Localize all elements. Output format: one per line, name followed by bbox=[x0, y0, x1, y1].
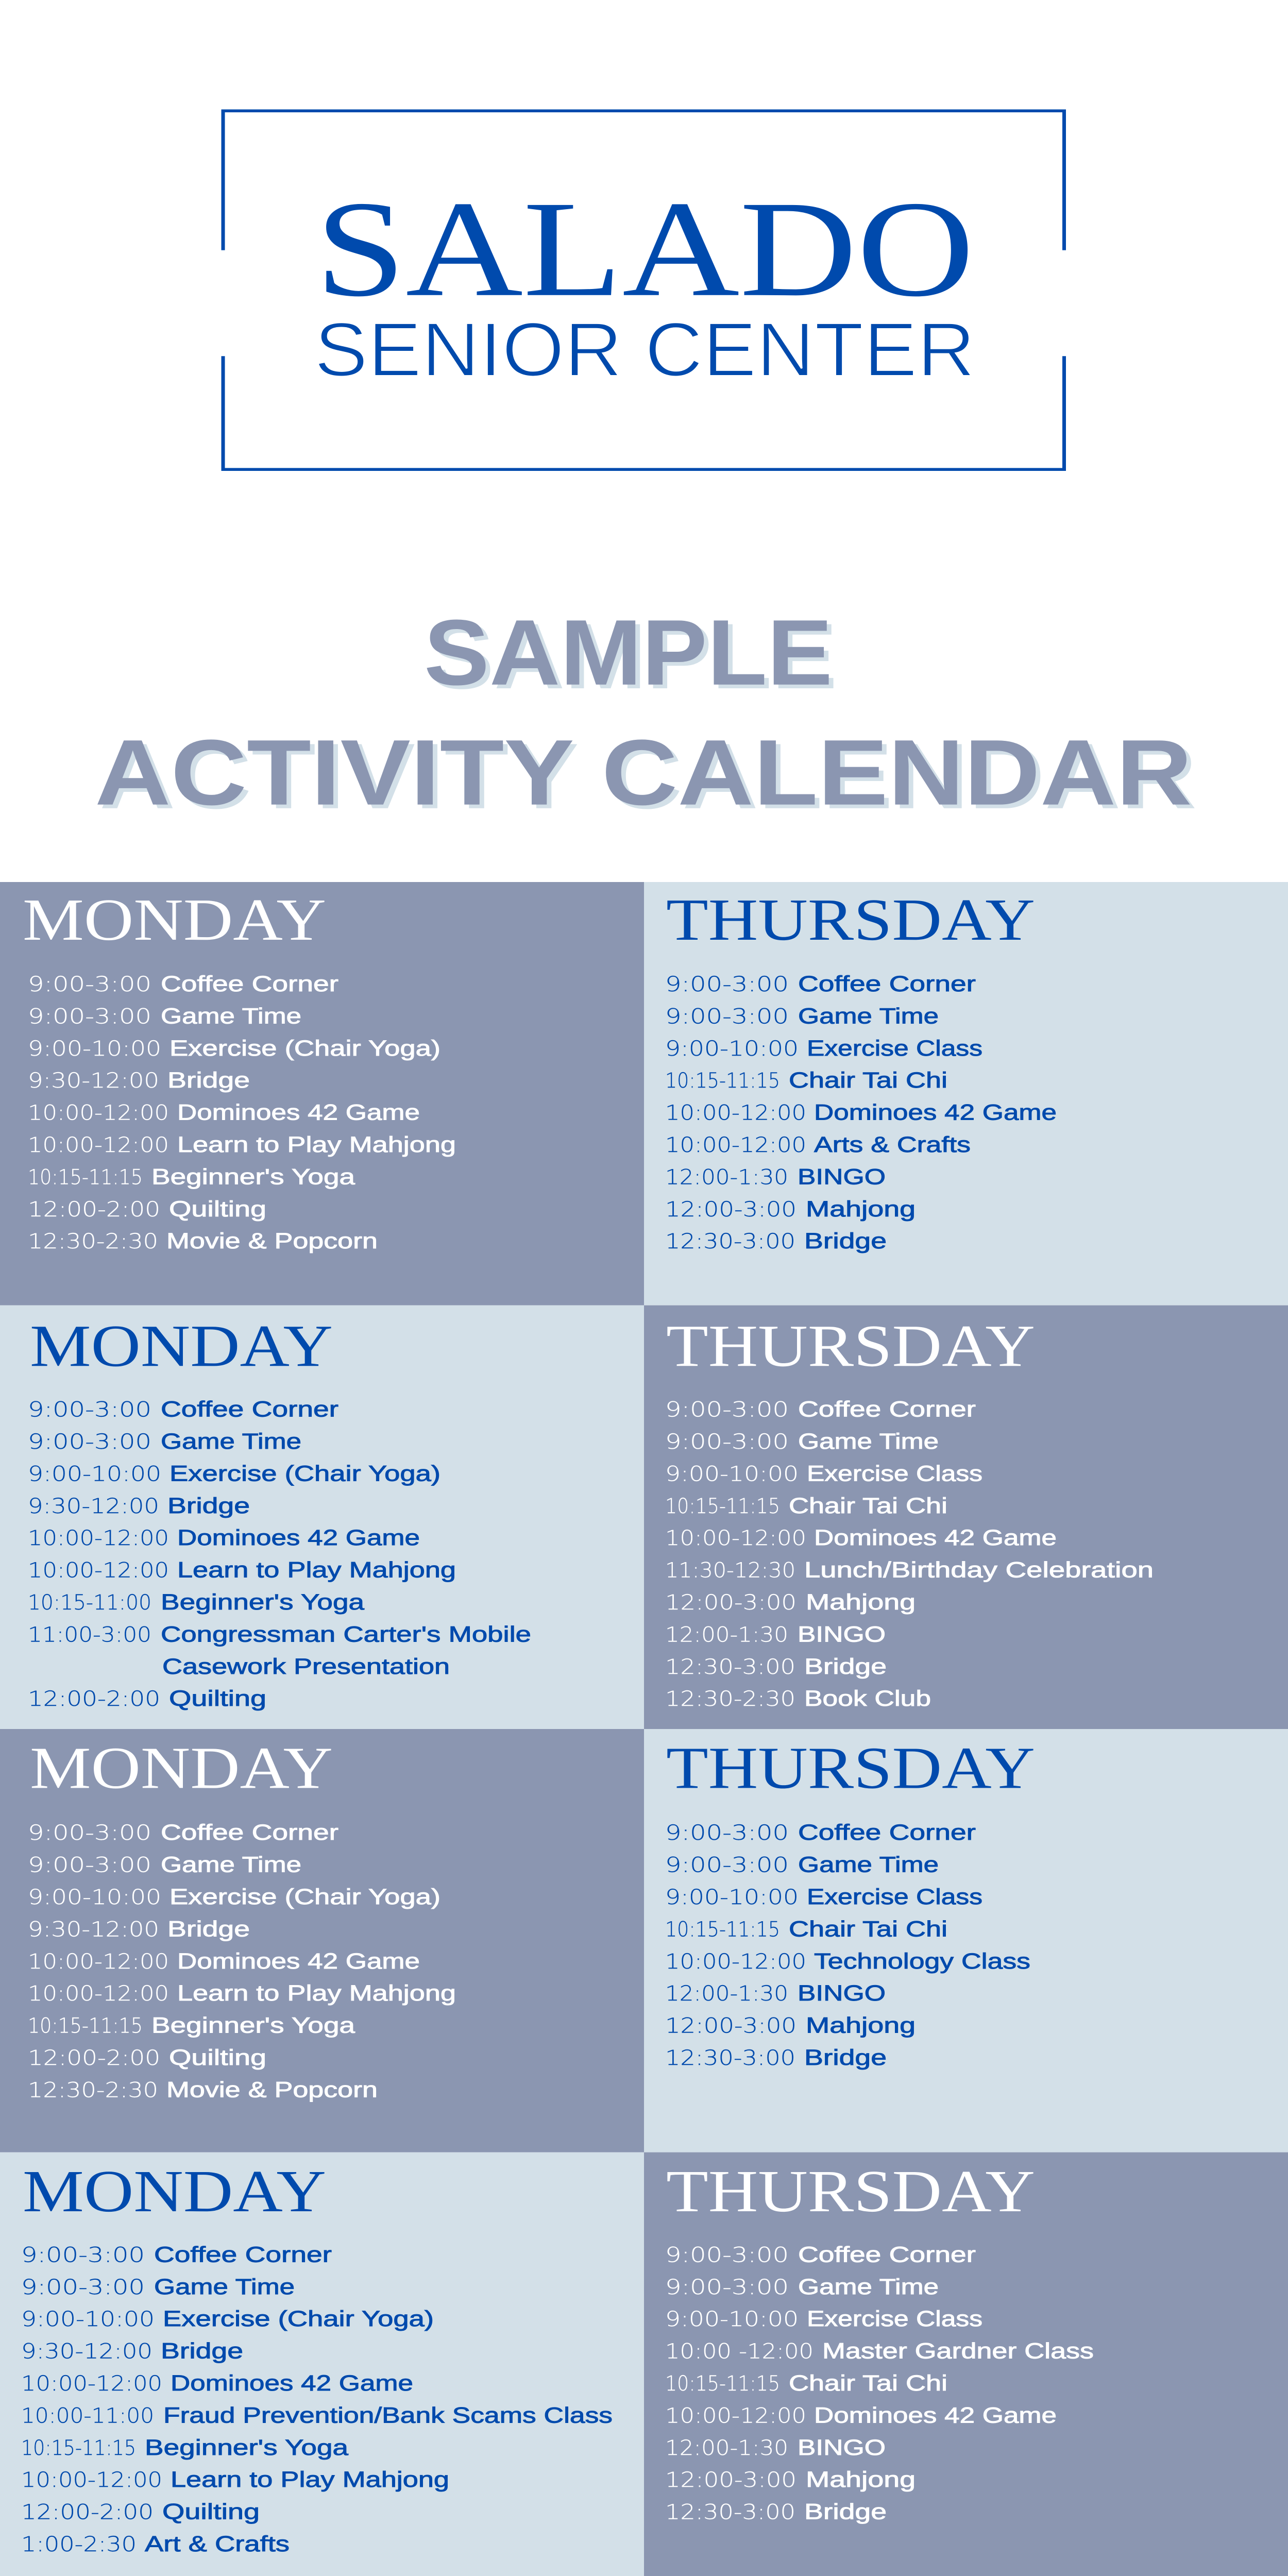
schedule list: Beginner's Yoga bbox=[161, 1590, 364, 1615]
schedule list: 10:15-11:15 bbox=[21, 2436, 136, 2460]
schedule list: Dominoes 42 Game bbox=[177, 1100, 420, 1125]
schedule list: 10:00-12:00 bbox=[28, 1950, 169, 1974]
logo: Salado Senior Center bbox=[223, 111, 1064, 469]
schedule list: 9:00-10:00 bbox=[665, 1885, 799, 1909]
schedule list: 12:00-1:30 bbox=[665, 1165, 788, 1189]
title line 2: Activity Calendar: ACTIVITY CALENDAR bbox=[99, 724, 1197, 828]
heading: Monday: MONDAY bbox=[30, 1735, 333, 1801]
schedule list: 10:00-12:00 bbox=[665, 1950, 806, 1974]
schedule list: 9:00-3:00 bbox=[665, 972, 789, 996]
schedule list: 12:30-3:00 bbox=[665, 1229, 795, 1253]
schedule list bbox=[21, 2243, 613, 2556]
schedule list: 9:00-3:00 bbox=[28, 1853, 151, 1877]
schedule list: Book Club bbox=[804, 1687, 931, 1711]
schedule list: Mahjong bbox=[806, 1590, 916, 1615]
schedule list: 10:15-11:15 bbox=[28, 2013, 143, 2038]
schedule list: 12:30-2:30 bbox=[28, 2078, 158, 2102]
schedule list: 10:00 -12:00 bbox=[665, 2339, 814, 2363]
schedule list bbox=[28, 1397, 531, 1711]
schedule list: 12:00-3:00 bbox=[665, 2468, 796, 2492]
schedule list: 10:00-12:00 bbox=[665, 1100, 806, 1125]
schedule list: Game Time bbox=[161, 1430, 301, 1454]
schedule list: 10:15-11:00 bbox=[28, 1590, 151, 1615]
logo frame bbox=[223, 111, 1064, 469]
schedule list: 12:00-2:00 bbox=[28, 1687, 160, 1711]
schedule list: 12:00-2:00 bbox=[28, 2046, 160, 2070]
schedule list: Quilting bbox=[169, 1197, 266, 1222]
schedule list: Exercise (Chair Yoga) bbox=[163, 2307, 434, 2331]
schedule list: 10:00-12:00 bbox=[28, 1558, 169, 1582]
schedule list: Coffee Corner bbox=[798, 2243, 976, 2267]
schedule list bbox=[665, 1821, 1030, 2070]
schedule list: Technology Class bbox=[814, 1950, 1030, 1974]
panel: week 2 Thursday bbox=[644, 1306, 1288, 1729]
schedule list: Game Time bbox=[798, 2275, 939, 2299]
schedule list: 12:30-3:00 bbox=[665, 1655, 795, 1679]
schedule list: 10:00-12:00 bbox=[21, 2371, 162, 2396]
schedule list: Exercise Class bbox=[807, 1462, 982, 1486]
schedule list: Casework Presentation bbox=[162, 1655, 450, 1679]
schedule list: 9:30-12:00 bbox=[28, 1917, 159, 1941]
logo wordmark: Salado: SALADO bbox=[315, 173, 974, 325]
logo subtitle: Senior Center: SENIOR CENTER bbox=[314, 307, 975, 392]
schedule list: 9:00-3:00 bbox=[21, 2275, 145, 2299]
schedule list: 9:00-10:00 bbox=[28, 1037, 161, 1061]
schedule list: Game Time bbox=[798, 1430, 939, 1454]
schedule list: Coffee Corner bbox=[154, 2243, 332, 2267]
schedule list: Game Time bbox=[798, 1004, 939, 1028]
title line 2: Activity Calendar: ACTIVITY CALENDAR bbox=[95, 721, 1192, 824]
schedule list: 12:00-1:30 bbox=[665, 1981, 788, 2006]
schedule list: 10:00-12:00 bbox=[28, 1526, 169, 1550]
schedule list: 9:00-3:00 bbox=[665, 1004, 789, 1028]
schedule list bbox=[28, 972, 456, 1253]
schedule list: Bridge bbox=[804, 2500, 887, 2524]
schedule list: Exercise Class bbox=[807, 1037, 982, 1061]
schedule list: Bridge bbox=[804, 1655, 887, 1679]
schedule list: 10:00-12:00 bbox=[665, 1133, 806, 1157]
schedule list: 10:15-11:15 bbox=[665, 2371, 780, 2396]
schedule list: Coffee Corner bbox=[161, 1397, 338, 1421]
schedule list: 12:30-3:00 bbox=[665, 2500, 795, 2524]
schedule list: Exercise Class bbox=[807, 1885, 982, 1909]
schedule list: Coffee Corner bbox=[798, 1821, 976, 1845]
schedule list: Bridge bbox=[167, 1917, 250, 1941]
schedule list: 9:00-3:00 bbox=[665, 2243, 789, 2267]
schedule list: Quilting bbox=[162, 2500, 260, 2524]
schedule list: 10:00-12:00 bbox=[665, 2403, 806, 2428]
schedule list: 11:30-12:30 bbox=[665, 1558, 795, 1582]
panel: week 3 Thursday bbox=[644, 1729, 1288, 2153]
schedule list: Chair Tai Chi bbox=[789, 2371, 947, 2396]
schedule list: Exercise Class bbox=[807, 2307, 982, 2331]
schedule list: Dominoes 42 Game bbox=[177, 1950, 420, 1974]
panel: week 1 Monday bbox=[0, 882, 644, 1306]
schedule list: Learn to Play Mahjong bbox=[177, 1558, 456, 1582]
panel: week 4 Thursday bbox=[644, 2153, 1288, 2576]
schedule list: Arts & Crafts bbox=[814, 1133, 971, 1157]
schedule list: Bridge bbox=[161, 2339, 243, 2363]
schedule list: 9:00-10:00 bbox=[21, 2307, 155, 2331]
schedule list: Exercise (Chair Yoga) bbox=[170, 1885, 440, 1909]
schedule list: 9:00-3:00 bbox=[665, 2275, 789, 2299]
schedule list: Learn to Play Mahjong bbox=[171, 2468, 449, 2492]
schedule list: 12:00-1:30 bbox=[665, 1622, 788, 1647]
heading: Thursday: THURSDAY bbox=[666, 2159, 1035, 2225]
schedule list: Coffee Corner bbox=[161, 972, 338, 996]
schedule list: Exercise (Chair Yoga) bbox=[170, 1037, 440, 1061]
schedule list: Chair Tai Chi bbox=[789, 1494, 947, 1518]
schedule list: 10:00-12:00 bbox=[28, 1133, 169, 1157]
schedule list: Game Time bbox=[798, 1853, 939, 1877]
schedule list: 10:15-11:15 bbox=[28, 1165, 143, 1189]
schedule list: Game Time bbox=[161, 1004, 301, 1028]
schedule list: Bridge bbox=[804, 1229, 887, 1253]
schedule list: 10:15-11:15 bbox=[665, 1069, 780, 1093]
schedule list: Exercise (Chair Yoga) bbox=[170, 1462, 440, 1486]
title line 1: Sample: SAMPLE bbox=[424, 601, 833, 705]
schedule list: Quilting bbox=[169, 2046, 266, 2070]
schedule list: 9:00-3:00 bbox=[665, 1430, 789, 1454]
schedule list: Bridge bbox=[167, 1494, 250, 1518]
schedule list bbox=[665, 1397, 1154, 1711]
schedule list: 10:15-11:15 bbox=[665, 1494, 780, 1518]
schedule list: Lunch/Birthday Celebration bbox=[804, 1558, 1154, 1582]
schedule list: 10:15-11:15 bbox=[665, 1917, 780, 1941]
schedule list: 10:00-12:00 bbox=[28, 1100, 169, 1125]
schedule list: Mahjong bbox=[806, 2468, 916, 2492]
schedule list: Beginner's Yoga bbox=[145, 2436, 348, 2460]
schedule list: 9:00-3:00 bbox=[28, 1004, 151, 1028]
heading: Monday: MONDAY bbox=[23, 2159, 326, 2225]
schedule list: 9:00-3:00 bbox=[28, 1821, 151, 1845]
schedule list: Movie & Popcorn bbox=[166, 2078, 378, 2102]
schedule list: 12:30-2:30 bbox=[28, 1229, 158, 1253]
schedule list: Dominoes 42 Game bbox=[814, 2403, 1057, 2428]
schedule list: Art & Crafts bbox=[145, 2532, 290, 2556]
schedule list: 12:30-3:00 bbox=[665, 2046, 795, 2070]
schedule list: 9:30-12:00 bbox=[28, 1494, 159, 1518]
schedule list: BINGO bbox=[798, 1622, 886, 1647]
schedule list: 1:00-2:30 bbox=[21, 2532, 137, 2556]
schedule list: Beginner's Yoga bbox=[151, 1165, 355, 1189]
schedule list: 10:00-12:00 bbox=[28, 1981, 169, 2006]
schedule list: 9:00-3:00 bbox=[21, 2243, 145, 2267]
schedule list: 12:30-2:30 bbox=[665, 1687, 795, 1711]
schedule list: 10:00-11:00 bbox=[21, 2403, 154, 2428]
schedule list: 10:00-12:00 bbox=[665, 1526, 806, 1550]
title: Sample Activity Calendar bbox=[95, 601, 1197, 828]
schedule list: 9:00-3:00 bbox=[665, 1821, 789, 1845]
schedule list: 9:00-10:00 bbox=[665, 2307, 799, 2331]
schedule list: 9:00-10:00 bbox=[665, 1462, 799, 1486]
title line 1: Sample: SAMPLE bbox=[429, 604, 837, 708]
schedule list: Bridge bbox=[167, 1069, 250, 1093]
schedule list: Learn to Play Mahjong bbox=[177, 1133, 456, 1157]
schedule list: Chair Tai Chi bbox=[789, 1917, 947, 1941]
schedule list: Congressman Carter's Mobile bbox=[161, 1622, 531, 1647]
schedule list: Fraud Prevention/Bank Scams Class bbox=[163, 2403, 613, 2428]
schedule list: 11:00-3:00 bbox=[28, 1622, 151, 1647]
schedule list: Chair Tai Chi bbox=[789, 1069, 947, 1093]
schedule list: 9:00-10:00 bbox=[665, 1037, 799, 1061]
schedule list: BINGO bbox=[798, 2436, 886, 2460]
schedule list: Movie & Popcorn bbox=[166, 1229, 378, 1253]
schedule list bbox=[665, 2243, 1094, 2524]
schedule list: Mahjong bbox=[806, 2013, 916, 2038]
schedule list bbox=[28, 1821, 456, 2102]
schedule list: Dominoes 42 Game bbox=[814, 1526, 1057, 1550]
heading: Thursday: THURSDAY bbox=[666, 887, 1035, 953]
schedule list: Mahjong bbox=[806, 1197, 916, 1222]
schedule list: 9:00-3:00 bbox=[28, 1397, 151, 1421]
schedule list bbox=[665, 972, 1057, 1253]
schedule list: Game Time bbox=[154, 2275, 295, 2299]
schedule list: 9:00-3:00 bbox=[665, 1853, 789, 1877]
schedule list: 9:00-10:00 bbox=[28, 1885, 161, 1909]
heading: Thursday: THURSDAY bbox=[666, 1313, 1035, 1379]
schedule list: 12:00-3:00 bbox=[665, 1197, 796, 1222]
schedule list: Dominoes 42 Game bbox=[171, 2371, 413, 2396]
schedule list: 9:00-3:00 bbox=[28, 1430, 151, 1454]
schedule list: Dominoes 42 Game bbox=[177, 1526, 420, 1550]
schedule list: BINGO bbox=[798, 1981, 886, 2006]
schedule list: 9:00-3:00 bbox=[665, 1397, 789, 1421]
schedule list: 9:00-10:00 bbox=[28, 1462, 161, 1486]
schedule list: 10:00-12:00 bbox=[21, 2468, 162, 2492]
schedule list: Beginner's Yoga bbox=[151, 2013, 355, 2038]
schedule list: Coffee Corner bbox=[798, 1397, 976, 1421]
heading: Monday: MONDAY bbox=[23, 887, 326, 953]
schedule list: Coffee Corner bbox=[798, 972, 976, 996]
schedule list: 12:00-2:00 bbox=[28, 1197, 160, 1222]
schedule list: 12:00-1:30 bbox=[665, 2436, 788, 2460]
heading: Thursday: THURSDAY bbox=[666, 1735, 1035, 1801]
panel: week 2 Monday bbox=[0, 1306, 644, 1729]
schedule list: 12:00-2:00 bbox=[21, 2500, 154, 2524]
schedule list: Quilting bbox=[169, 1687, 266, 1711]
panel: week 3 Monday bbox=[0, 1729, 644, 2153]
schedule list: 12:00-3:00 bbox=[665, 1590, 796, 1615]
heading: Monday: MONDAY bbox=[30, 1313, 333, 1379]
schedule list: Learn to Play Mahjong bbox=[177, 1981, 456, 2006]
schedule list: Master Gardner Class bbox=[822, 2339, 1094, 2363]
schedule list: 9:30-12:00 bbox=[28, 1069, 159, 1093]
schedule list: 9:30-12:00 bbox=[21, 2339, 152, 2363]
schedule list: Game Time bbox=[161, 1853, 301, 1877]
schedule list: 9:00-3:00 bbox=[28, 972, 151, 996]
panel: week 4 Monday bbox=[0, 2153, 644, 2576]
schedule list: Dominoes 42 Game bbox=[814, 1100, 1057, 1125]
schedule list: 12:00-3:00 bbox=[665, 2013, 796, 2038]
schedule list: Bridge bbox=[804, 2046, 887, 2070]
panel: week 1 Thursday bbox=[644, 882, 1288, 1306]
schedule list: Coffee Corner bbox=[161, 1821, 338, 1845]
schedule list: BINGO bbox=[798, 1165, 886, 1189]
